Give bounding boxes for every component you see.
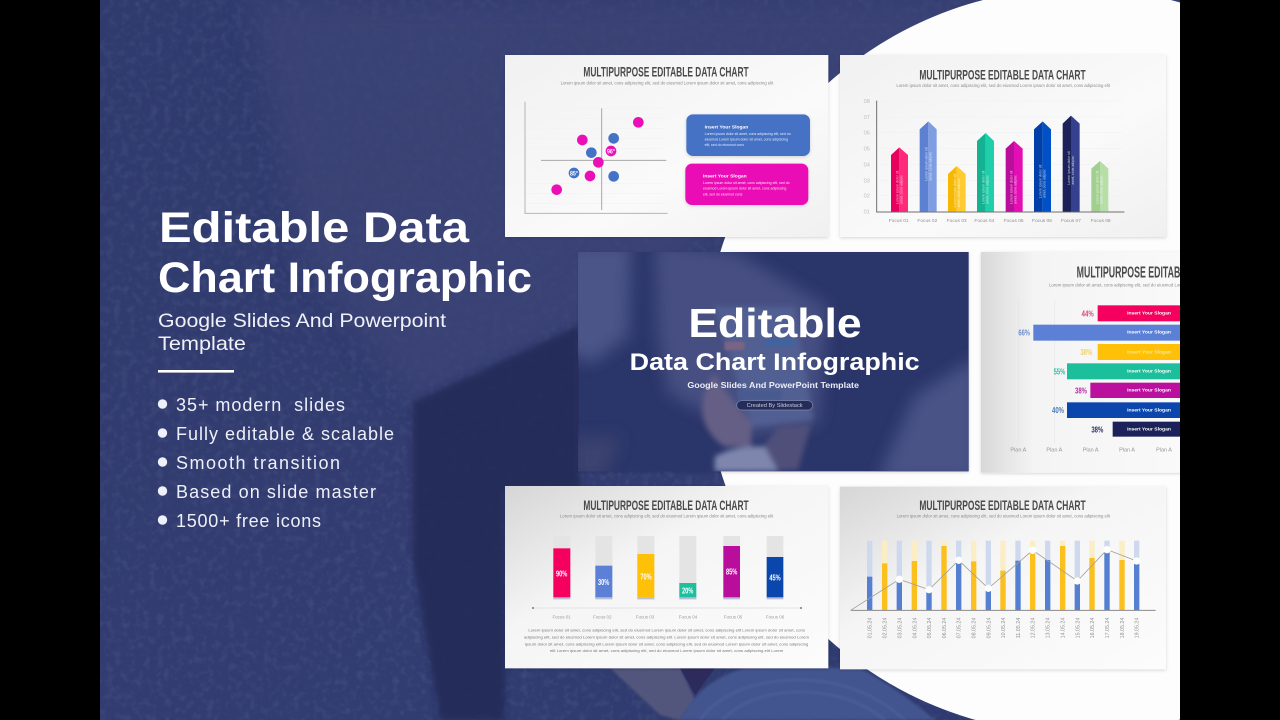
scatter plot bbox=[525, 102, 668, 213]
arrow bar chart: 07 bbox=[864, 115, 870, 121]
slide title: MULTIPURPOSE EDITABLE DATA CHART bbox=[919, 498, 1086, 513]
body paragraph: adipiscing elit, sed do eiusmod Lorem ipsum dolor sit amet, cons adipiscing elit. Lorem ipsum dolor sit amet, cons adipiscing elit, sed do eiusmod Lorem bbox=[524, 635, 810, 640]
badge: created by: Created By Slidestack bbox=[747, 403, 803, 409]
arrow bar chart: Lorem ipsum dolor sit bbox=[1067, 151, 1071, 185]
column chart bbox=[532, 536, 802, 619]
subheading: Template bbox=[158, 333, 246, 355]
callout: pink slogan: Lorem ipsum dolor sit amet, cons adipiscing elit, sed do bbox=[703, 181, 790, 185]
combo chart: 15.05.24 bbox=[1075, 618, 1081, 638]
combo chart: 01.05.24 bbox=[868, 618, 874, 638]
slide: combo bar and line chart bbox=[840, 487, 1166, 669]
slide subtitle: Lorem ipsum dolor sit amet, cons adipiscing elit, sed do eiusmod Lorem ipsum dolor sit amet, cons adipiscing elit bbox=[896, 83, 1111, 88]
column chart: Focus 06 bbox=[766, 614, 785, 619]
horizontal bar chart bbox=[1010, 300, 1204, 454]
cover photo: tablet and hand bbox=[578, 252, 969, 472]
body paragraph: Lorem ipsum dolor sit amet, cons adipiscing elit, sed do eiusmod Lorem ipsum dolor sit amet, cons adipiscing elit Lorem ipsum dolor sit amet, cons bbox=[528, 628, 805, 633]
arrow bar chart: amet, cons adipisc bbox=[1100, 175, 1104, 204]
horizontal bar chart: Plan A bbox=[1156, 448, 1172, 454]
arrow bar chart: 04 bbox=[864, 162, 870, 168]
horizontal bar chart: Plan A bbox=[1046, 448, 1063, 454]
slide title: MULTIPURPOSE EDITABLE DATA CHART bbox=[919, 67, 1086, 82]
body paragraph bbox=[524, 628, 810, 653]
combo chart: 06.05.24 bbox=[942, 618, 948, 638]
horizontal bar chart: 38% bbox=[1075, 385, 1087, 395]
arrow bar chart: 02 bbox=[864, 194, 870, 200]
arrow bar chart: Focus 06 bbox=[1032, 218, 1052, 224]
combo chart: 05.05.24 bbox=[927, 618, 933, 638]
callout: blue slogan: eiusmod Lorem ipsum dolor sit amet, cons adipiscing bbox=[705, 137, 788, 141]
arrow bar chart: Lorem ipsum dolor sit bbox=[896, 171, 900, 204]
subheading: Google Slides And Powerpoint bbox=[158, 310, 447, 332]
arrow bar chart: amet, cons adipisc bbox=[957, 178, 961, 207]
arrow bar chart: Focus 02 bbox=[917, 218, 938, 224]
arrow bar chart: Focus 04 bbox=[974, 218, 995, 224]
combo chart: 16.05.24 bbox=[1090, 618, 1096, 638]
badge: created by bbox=[737, 401, 813, 410]
combo chart: 17.05.24 bbox=[1105, 618, 1111, 638]
horizontal bar chart: Insert Your Slogan bbox=[1127, 330, 1171, 336]
column chart: Focus 04 bbox=[679, 614, 698, 619]
callout: pink slogan: Insert Your Slogan bbox=[703, 173, 747, 178]
arrow bar chart: amet, cons adipisc bbox=[1071, 156, 1075, 185]
bullet list: Smooth transition bbox=[176, 453, 340, 473]
white circle bbox=[704, 0, 1280, 720]
slide: scatter chart bbox=[505, 55, 828, 237]
column chart: 85% bbox=[726, 567, 738, 577]
arrow bar chart: Focus 05 bbox=[1004, 218, 1024, 224]
bullet list: Fully editable & scalable bbox=[176, 424, 394, 444]
horizontal bar chart: 40% bbox=[1052, 405, 1064, 415]
slide: progress columns bbox=[505, 486, 828, 668]
horizontal bar chart: Plan A bbox=[1119, 448, 1135, 454]
column chart: 90% bbox=[556, 568, 568, 578]
horizontal bar chart: Insert Your Slogan bbox=[1127, 349, 1171, 355]
combo chart: 18.05.24 bbox=[1120, 618, 1126, 638]
horizontal bar chart: Insert Your Slogan bbox=[1127, 407, 1171, 413]
arrow bar chart: Focus 07 bbox=[1061, 218, 1081, 224]
slide: arrow bar chart bbox=[840, 55, 1166, 237]
subheading bbox=[158, 310, 447, 355]
horizontal bar chart: 38% bbox=[1080, 347, 1093, 357]
column chart: 20% bbox=[682, 586, 694, 596]
column chart: 30% bbox=[598, 577, 610, 587]
arrow bar chart: amet, cons adipisc bbox=[900, 175, 904, 204]
arrow bar chart bbox=[864, 99, 1124, 224]
arrow bar chart: Lorem ipsum dolor sit bbox=[1038, 165, 1042, 198]
column chart: Focus 03 bbox=[636, 614, 655, 619]
cover tagline: Google Slides And PowerPoint Template bbox=[687, 380, 859, 390]
callout: blue slogan: Lorem ipsum dolor sit amet, cons adipiscing elit, sed do bbox=[705, 132, 791, 136]
cover subtitle: Data Chart Infographic bbox=[630, 349, 920, 376]
combo chart: 02.05.24 bbox=[883, 618, 889, 638]
bullet list bbox=[158, 395, 394, 531]
combo chart: 19.05.24 bbox=[1135, 618, 1141, 638]
arrow bar chart: 03 bbox=[864, 178, 870, 184]
arrow bar chart: Focus 01 bbox=[889, 218, 909, 224]
horizontal bar chart: Plan A bbox=[1010, 448, 1027, 454]
slide: cover bbox=[578, 252, 970, 474]
main heading bbox=[158, 204, 532, 302]
combo chart: 04.05.24 bbox=[912, 618, 918, 638]
combo chart: 12.05.24 bbox=[1031, 618, 1037, 638]
bullet list: Based on slide master bbox=[176, 482, 376, 502]
combo chart: 08.05.24 bbox=[972, 618, 978, 638]
column chart: Focus 01 bbox=[552, 614, 571, 619]
column chart: Focus 05 bbox=[724, 614, 743, 619]
horizontal bar chart: Insert Your Slogan bbox=[1127, 369, 1171, 375]
arrow bar chart: Lorem ipsum dolor sit bbox=[924, 147, 928, 181]
slide subtitle: Lorem ipsum dolor sit amet, cons adipiscing elit, sed do eiusmod Lorem ipsum dolor sit amet, cons adipiscing elit bbox=[897, 514, 1111, 519]
slide title: MULTIPURPOSE EDITABLE DATA CHART bbox=[583, 65, 749, 80]
arrow bar chart: 01 bbox=[864, 209, 870, 215]
arrow bar chart: 08 bbox=[864, 99, 870, 105]
scatter plot: 96° bbox=[607, 148, 615, 156]
arrow bar chart: amet, cons adipisc bbox=[928, 152, 932, 181]
slide subtitle: Lorem ipsum dolor sit amet, cons adipiscing elit, sed do eiusmod Lorem ipsum dolor sit amet, cons adipiscing elit bbox=[561, 80, 774, 85]
callout: pink slogan: eiusmod Lorem ipsum dolor sit amet, cons adipiscing bbox=[703, 186, 786, 190]
main heading: Editable Data bbox=[159, 204, 470, 252]
combo chart: 14.05.24 bbox=[1061, 618, 1067, 638]
arrow bar chart: Focus 08 bbox=[1091, 218, 1111, 224]
slide subtitle: Lorem ipsum dolor sit amet, cons adipiscing elit, sed do eiusmod Lorem ipsum dolor sit amet, cons adipiscing elit bbox=[560, 514, 774, 519]
combo chart: 13.05.24 bbox=[1046, 618, 1052, 638]
callout: pink slogan: elit, sed do eiusmod cons bbox=[703, 192, 743, 196]
combo chart: 11.05.24 bbox=[1016, 618, 1022, 638]
combo chart bbox=[851, 541, 1156, 638]
combo chart: 07.05.24 bbox=[957, 618, 963, 638]
column chart: 45% bbox=[769, 573, 781, 583]
horizontal bar chart: Insert Your Slogan bbox=[1127, 388, 1171, 394]
arrow bar chart: amet, cons adipisc bbox=[1042, 169, 1046, 198]
callout: blue slogan: Insert Your Slogan bbox=[705, 124, 748, 129]
arrow bar chart: Lorem ipsum dolor sit bbox=[1010, 171, 1014, 204]
combo chart: 03.05.24 bbox=[897, 618, 903, 638]
horizontal bar chart: Plan A bbox=[1083, 448, 1099, 454]
column chart: 70% bbox=[640, 571, 652, 581]
arrow bar chart: 06 bbox=[864, 130, 870, 136]
slide subtitle: Lorem ipsum dolor sit amet, cons adipiscing elit, sed do eiusmod Lorem ipsum dolor sit amet, cons adipiscing elit bbox=[1049, 283, 1266, 288]
slide title: MULTIPURPOSE EDITABLE DATA CHART bbox=[583, 498, 749, 513]
body paragraph: elit Lorem ipsum dolor sit amet, cons adipiscing elit, sed do eiusmod Lorem ipsum dolor sit amet, cons adipiscing elit Lorem bbox=[550, 648, 784, 653]
arrow bar chart: amet, cons adipisc bbox=[986, 175, 990, 204]
arrow bar chart: 05 bbox=[864, 146, 870, 152]
callout: pink slogan bbox=[685, 164, 808, 205]
horizontal bar chart: Insert Your Slogan bbox=[1127, 426, 1171, 432]
combo chart: 09.05.24 bbox=[986, 618, 992, 638]
body paragraph: ipsum dolor sit amet, cons adipiscing elit Lorem ipsum dolor sit amet, cons adipiscing elit, sed do eiusmod Lorem ipsum dolor sit amet, cons adipiscing bbox=[525, 641, 808, 646]
arrow bar chart: Lorem ipsum dolor sit bbox=[982, 171, 986, 204]
scatter plot: 85° bbox=[570, 170, 578, 178]
callout: blue slogan bbox=[686, 114, 810, 156]
horizontal bar chart: 44% bbox=[1082, 308, 1094, 318]
horizontal bar chart: Insert Your Slogan bbox=[1127, 311, 1171, 317]
arrow bar chart: Focus 03 bbox=[947, 218, 967, 224]
horizontal bar chart: 55% bbox=[1054, 366, 1066, 376]
bullet list: 1500+ free icons bbox=[176, 511, 321, 531]
cover title: Editable bbox=[688, 300, 862, 346]
arrow bar chart: Lorem ipsum dolor sit bbox=[953, 174, 957, 207]
arrow bar chart: Lorem ipsum dolor sit bbox=[1096, 171, 1100, 204]
horizontal bar chart: 66% bbox=[1018, 328, 1030, 338]
combo chart: 10.05.24 bbox=[1001, 618, 1007, 638]
arrow bar chart: amet, cons adipisc bbox=[1014, 175, 1018, 204]
main heading: Chart Infographic bbox=[158, 254, 532, 302]
slide: horizontal bars bbox=[981, 252, 1266, 473]
column chart: Focus 02 bbox=[593, 614, 612, 619]
horizontal bar chart: 38% bbox=[1091, 425, 1104, 435]
bullet list: 35+ modern slides bbox=[176, 395, 345, 415]
callout: blue slogan: elit, sed do eiusmod cons bbox=[705, 143, 744, 147]
